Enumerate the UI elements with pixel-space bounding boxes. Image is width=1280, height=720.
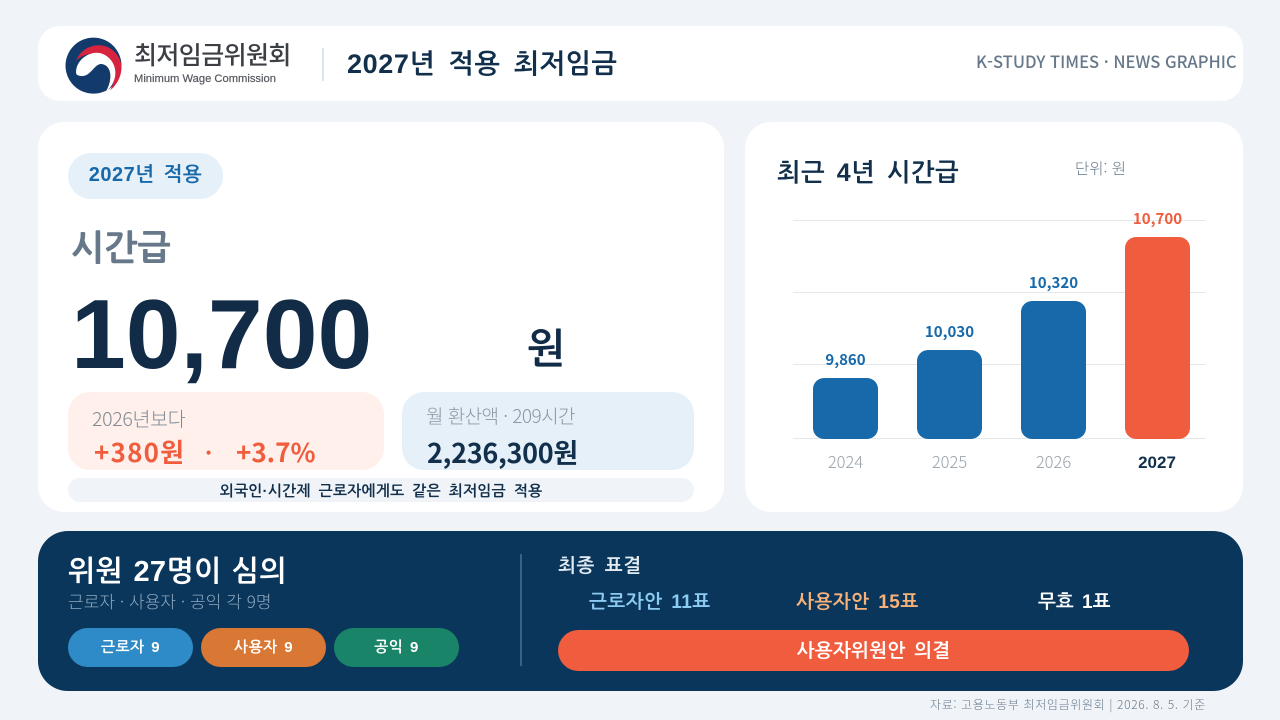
chart title: 최근 4년 시간급 — [777, 159, 959, 187]
monthly amount: 2,236,300원 — [427, 432, 578, 471]
increase label: 2026년보다 — [92, 403, 185, 432]
bar 2026 — [1021, 272, 1086, 473]
bar 2027 — [1125, 208, 1190, 472]
committee sub text: 근로자 · 사용자 · 공익 각 9명 — [68, 588, 272, 613]
panel: hourly minimum wage — [38, 122, 724, 512]
monthly conversion box — [402, 392, 694, 470]
note bar: 외국인·시간제 근로자에게도 같은 최저임금 적용 — [220, 483, 542, 500]
separator dot: · — [205, 436, 212, 468]
pill: employers: 사용자 9 — [234, 639, 293, 656]
source note: 자료: 고용노동부 최저임금위원회 | 2026. 8. 5. 기준 — [930, 696, 1206, 713]
pill: public interest — [334, 628, 459, 667]
big wage figure: 10,700 — [71, 279, 372, 389]
bar 2025: 2025 — [932, 449, 967, 473]
wage unit: 원 — [527, 326, 566, 372]
monthly label: 월 환산액 · 209시간 — [426, 402, 575, 429]
bar 2026: 2026 — [1036, 449, 1071, 473]
vote: workers: 근로자안 11표 — [589, 592, 711, 613]
increase box — [68, 392, 384, 470]
pill: employers — [201, 628, 326, 667]
header title: 2027년 적용 최저임금 — [347, 49, 618, 79]
increase amount: +380원 — [94, 433, 185, 470]
pill: workers: 근로자 9 — [101, 639, 160, 656]
panel: 4-year hourly wage chart — [745, 122, 1243, 512]
label: hourly: 시간급 — [71, 229, 171, 268]
vote: employers: 사용자안 15표 — [796, 592, 919, 613]
bar 2025: 10,030 — [925, 321, 974, 342]
logo Korean name: 최저임금위원회 — [134, 36, 291, 72]
logo English name: Minimum Wage Commission — [134, 73, 276, 85]
bar 2024 — [813, 349, 878, 473]
pill: public interest: 공익 9 — [374, 639, 419, 656]
vote result bar: 사용자위원안 의결 — [797, 641, 950, 662]
unit label: 단위: 원 — [1075, 157, 1126, 179]
note bar — [68, 478, 694, 502]
icon: government taegeuk logo — [66, 38, 122, 94]
bar chart — [793, 208, 1206, 473]
vote: invalid: 무효 1표 — [1038, 592, 1110, 613]
bar 2027: 10,700 — [1133, 208, 1182, 229]
year badge — [68, 153, 223, 199]
bar 2027: 2027 — [1138, 453, 1176, 472]
header bar — [38, 26, 1243, 101]
bar 2026: 10,320 — [1029, 272, 1078, 293]
bar 2024: 2024 — [828, 449, 863, 473]
vote heading: 최종 표결 — [558, 556, 642, 577]
bar 2024: 9,860 — [825, 349, 866, 370]
bar 2025 — [917, 321, 982, 473]
vote result bar — [558, 630, 1189, 671]
committee heading: 위원 27명이 심의 — [68, 556, 287, 588]
panel: committee and vote — [38, 531, 1243, 691]
increase percent: +3.7% — [236, 433, 316, 470]
pill: workers — [68, 628, 193, 667]
publisher label: K-STUDY TIMES · NEWS GRAPHIC — [976, 49, 1237, 73]
year badge: 2027년 적용 — [89, 164, 202, 186]
